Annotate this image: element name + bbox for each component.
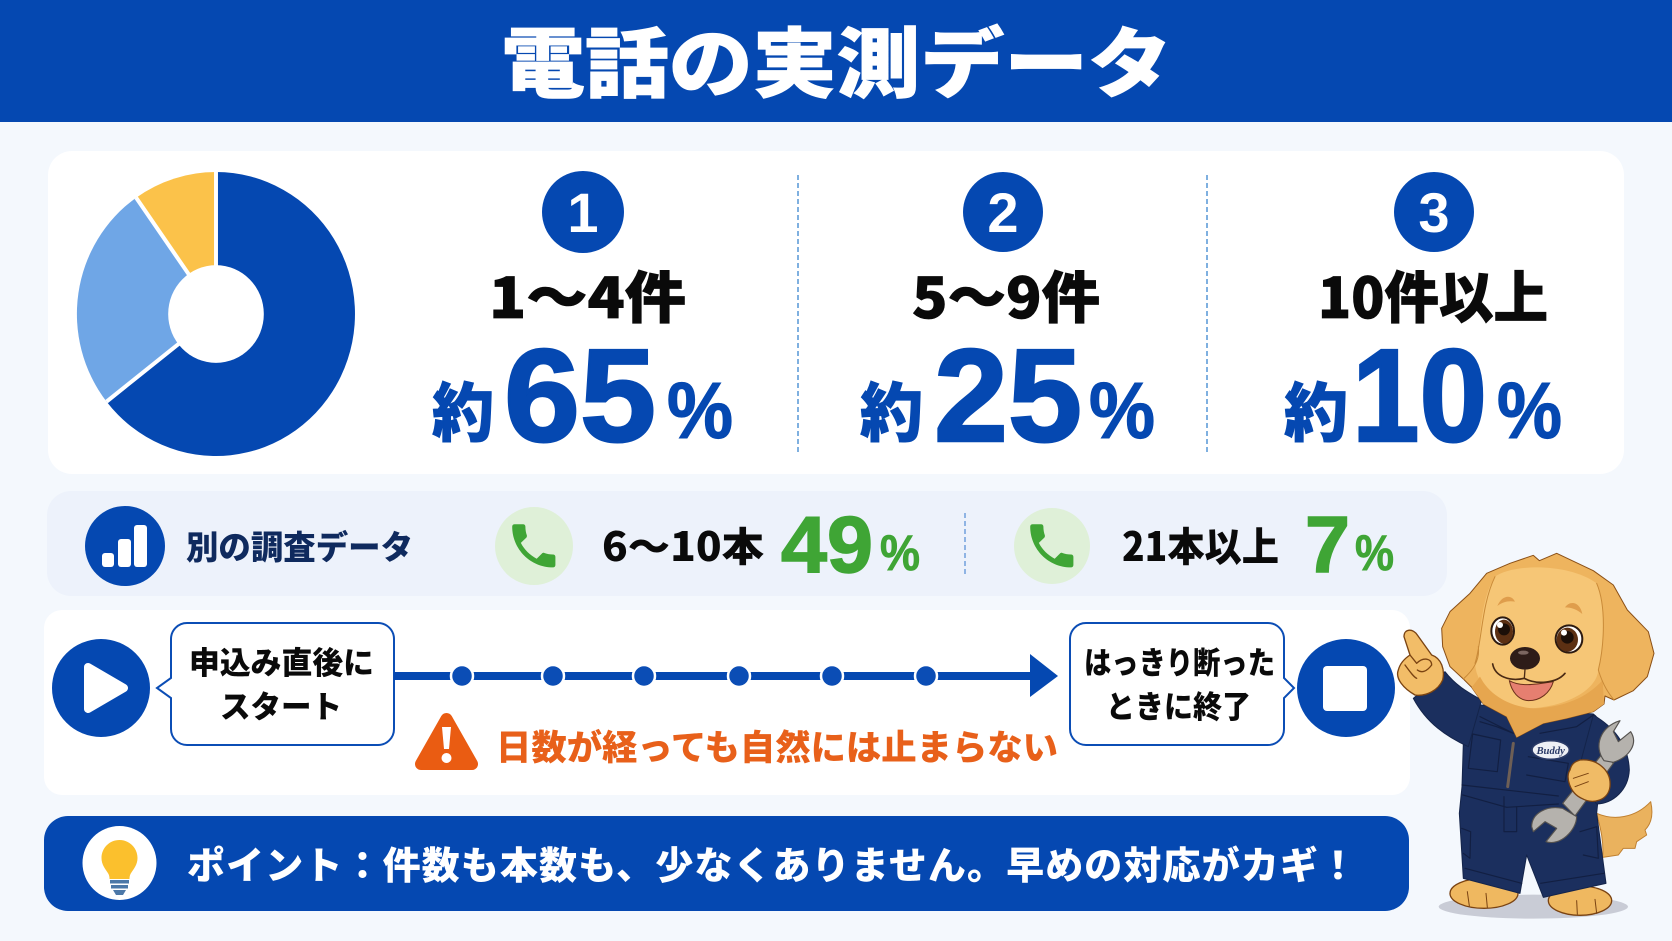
callout: start xyxy=(157,623,394,745)
stat: 6-10 calls 49%: 6～10本 xyxy=(602,515,764,573)
stat: 6-10 calls 49%: 49 xyxy=(781,500,873,589)
icon: light bulb xyxy=(82,826,156,900)
face xyxy=(1475,567,1603,708)
suit body xyxy=(1459,705,1606,897)
donut chart xyxy=(77,172,355,456)
eyes xyxy=(1491,617,1582,653)
key point text: ポイント：件数も本数も、少なくありません。早めの対応がカギ！ xyxy=(187,835,1357,890)
raised arm xyxy=(1413,672,1482,747)
panel: timeline xyxy=(44,610,1410,795)
title banner: 電話の実測データ xyxy=(501,3,1172,113)
feet xyxy=(1450,878,1518,908)
stat: 6-10 calls 49% xyxy=(495,500,920,589)
eyebrows xyxy=(1497,597,1515,606)
callout: start: スタート xyxy=(220,682,342,727)
stat 3: 10 or more calls: 約 xyxy=(1284,363,1348,455)
stat 1: 1-4 calls: 約 xyxy=(432,363,494,455)
right arm xyxy=(1577,715,1629,804)
stat 2: 5-9 calls xyxy=(860,172,1155,469)
stat 3: 10 or more calls: % xyxy=(1497,366,1562,455)
wrench xyxy=(1532,721,1634,843)
icon: play xyxy=(52,639,150,737)
name badge: Buddy xyxy=(1535,746,1565,757)
stat 1: 1-4 calls: 1 xyxy=(567,181,599,244)
panel: other survey data xyxy=(47,491,1447,596)
title banner xyxy=(0,0,1672,122)
callout: end: はっきり断った xyxy=(1084,638,1275,683)
icon: bar chart xyxy=(85,506,165,586)
name badge xyxy=(1532,741,1569,759)
fur ruff xyxy=(1472,677,1604,737)
stat 1: 1-4 calls: 65 xyxy=(504,322,656,469)
stat 3: 10 or more calls: 10件以上 xyxy=(1318,254,1548,335)
survey label: 別の調査データ xyxy=(186,521,413,569)
suit details xyxy=(1462,715,1604,883)
stat 3: 10 or more calls: 3 xyxy=(1418,181,1450,244)
panel: call count distribution xyxy=(48,151,1624,474)
mouth xyxy=(1493,664,1565,682)
icon: warning xyxy=(421,719,472,764)
stat 2: 5-9 calls: 25 xyxy=(934,322,1082,469)
stat 2: 5-9 calls: 2 xyxy=(987,181,1019,244)
stat 2: 5-9 calls: % xyxy=(1089,366,1155,455)
tail xyxy=(1597,802,1652,857)
pointing paw xyxy=(1398,630,1443,695)
callout: start: 申込み直後に xyxy=(189,638,374,683)
warning message: 日数が経っても自然には止まらない xyxy=(496,720,1058,771)
stat: 21 or more calls 7%: 21本以上 xyxy=(1122,515,1279,573)
ear edges xyxy=(1463,577,1614,700)
stat 3: 10 or more calls xyxy=(1284,172,1562,469)
tongue xyxy=(1509,681,1553,701)
shadow xyxy=(1439,895,1628,919)
panel: key point banner xyxy=(44,816,1409,911)
stat 2: 5-9 calls: 約 xyxy=(860,363,923,455)
stat 1: 1-4 calls: % xyxy=(667,366,733,455)
icon: stop xyxy=(1297,639,1395,737)
stat 1: 1-4 calls: 1～4件 xyxy=(489,254,686,335)
stat: 6-10 calls 49%: % xyxy=(880,525,920,581)
stat 2: 5-9 calls: 5～9件 xyxy=(912,254,1100,335)
stat 3: 10 or more calls: 10 xyxy=(1352,322,1487,469)
arrow: timeline with dots xyxy=(394,654,1058,697)
callout: end: ときに終了 xyxy=(1106,682,1251,727)
stat 1: 1-4 calls xyxy=(432,171,733,469)
stat: 21 or more calls 7%: 7 xyxy=(1305,500,1350,589)
muzzle and nose xyxy=(1510,647,1540,670)
callout: end xyxy=(1070,623,1294,745)
zipper xyxy=(1508,743,1513,787)
mascot: golden retriever puppy in overalls xyxy=(1398,553,1654,919)
holding paw xyxy=(1568,760,1610,801)
stat: 21 or more calls 7%: % xyxy=(1355,525,1394,581)
head and fur silhouette xyxy=(1442,553,1654,737)
stat: 21 or more calls 7% xyxy=(1014,500,1394,589)
